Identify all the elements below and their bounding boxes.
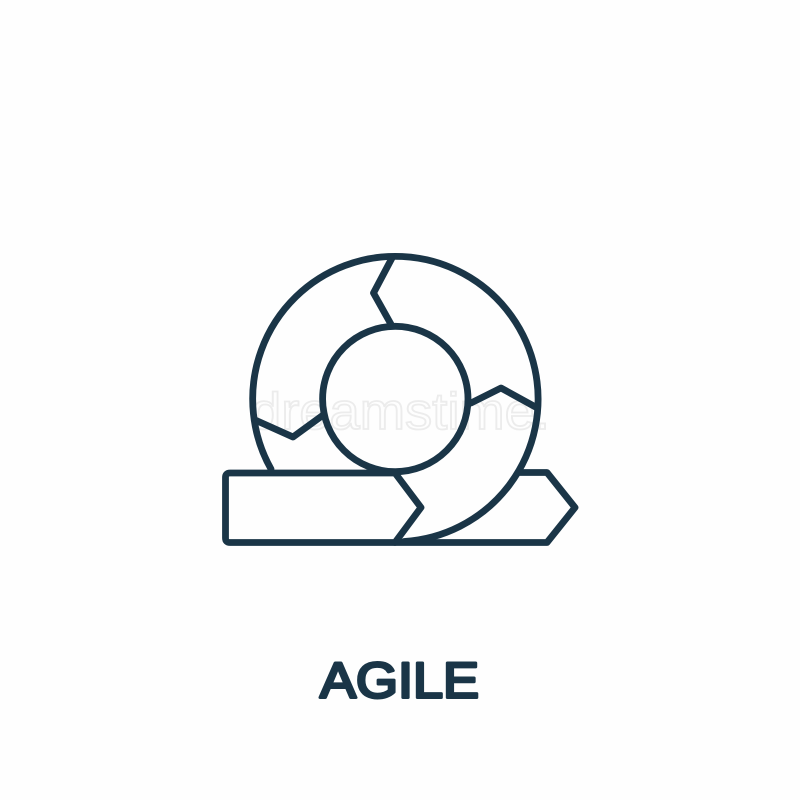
arrow head	[395, 472, 575, 542]
title: AGILE	[320, 652, 479, 708]
icon: agile cycle arrow	[226, 256, 575, 542]
inner circle	[323, 326, 468, 472]
top chevron divider	[374, 258, 392, 326]
right chevron divider	[471, 388, 536, 407]
horizontal arrow body with chevron notch	[226, 473, 421, 542]
outer ring arc	[253, 256, 538, 542]
watermark: dreamstime.	[251, 383, 550, 441]
left chevron divider	[255, 416, 322, 437]
